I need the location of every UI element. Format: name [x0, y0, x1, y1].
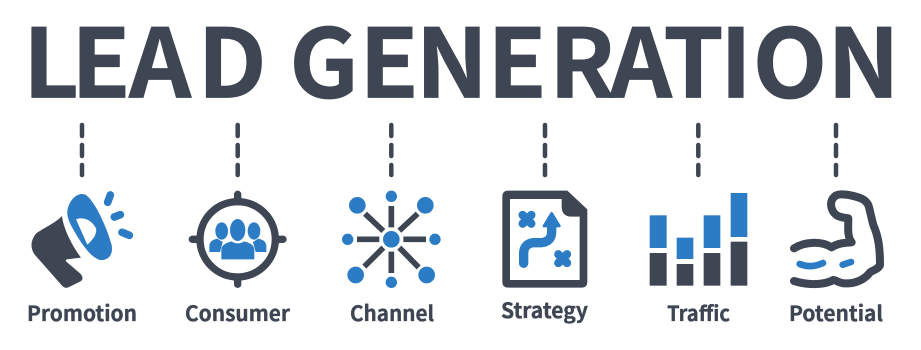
column: potential: [789, 125, 883, 328]
label: strategy: Strategy: [501, 295, 588, 325]
connector: strategy: [543, 125, 547, 175]
column: consumer: [185, 125, 291, 328]
icon: target with people: [192, 194, 283, 284]
connector: consumer: [235, 125, 240, 175]
column: promotion: [27, 125, 137, 328]
label: channel: Channel: [350, 298, 434, 328]
icon: strategy document: [502, 191, 587, 288]
connector: promotion: [80, 125, 84, 175]
icon: flexed arm: [794, 194, 880, 284]
connector: channel: [389, 125, 394, 175]
label: potential: Potential: [789, 298, 883, 328]
label: traffic: Traffic: [667, 298, 730, 328]
column: traffic: [650, 125, 747, 328]
icon: hub network: [342, 191, 441, 288]
connector: potential: [834, 125, 838, 175]
label: consumer: Consumer: [185, 298, 291, 328]
column: channel: [342, 125, 441, 328]
column: strategy: [501, 125, 588, 325]
label: promotion: Promotion: [27, 298, 137, 328]
connector: traffic: [696, 125, 701, 175]
icon: bar chart: [650, 193, 747, 286]
icon: megaphone: [31, 194, 129, 288]
